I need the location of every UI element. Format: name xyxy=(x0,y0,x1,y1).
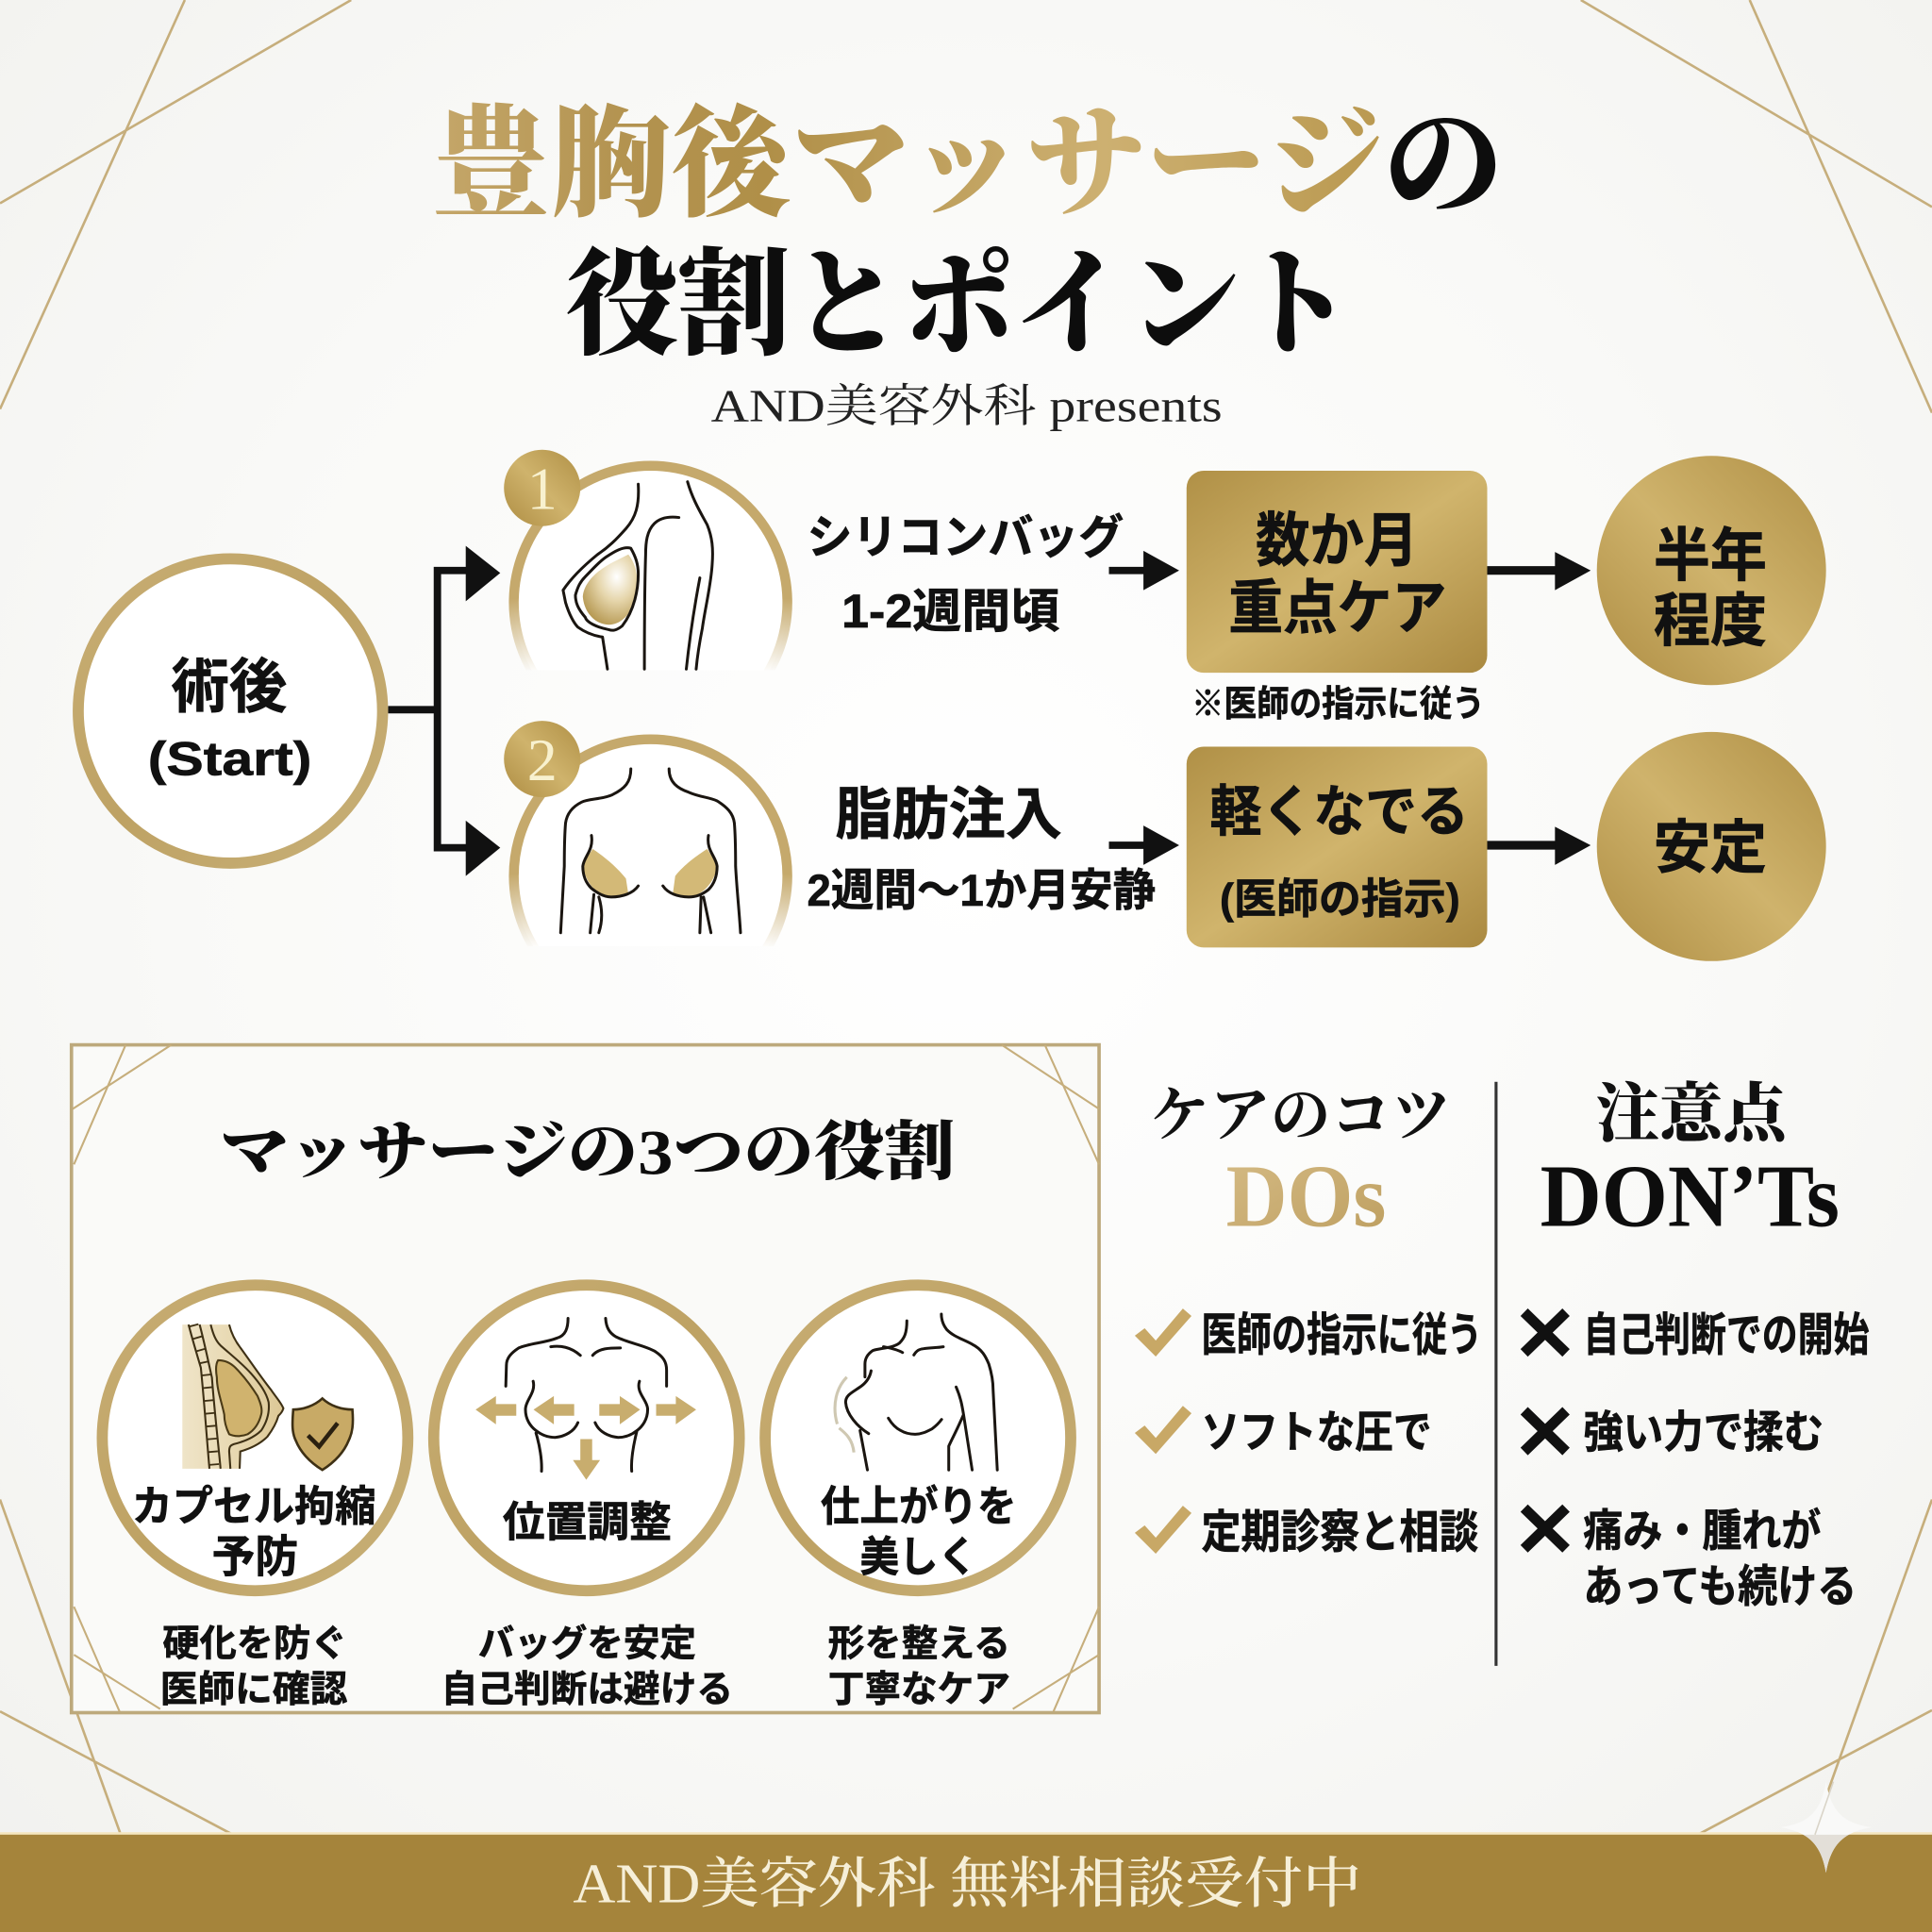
panel: three roles of massage xyxy=(72,1045,1099,1713)
role 3 caption xyxy=(828,1624,1010,1710)
DON'Ts list: 強い力で揉む xyxy=(1583,1407,1824,1457)
illustration 1: silicone bag side view xyxy=(508,460,792,671)
gold circle: half year: 程度 xyxy=(1654,589,1767,654)
step 1 label: シリコンバッグ xyxy=(808,510,1124,563)
panel frame xyxy=(72,1045,1099,1713)
role 1 caption xyxy=(160,1624,347,1710)
step 1 label: 1-2週間頃 xyxy=(841,585,1060,638)
title line 2: 役割とポイント xyxy=(566,242,1352,371)
role 1: capsule contracture prevention: 予防 xyxy=(212,1532,298,1582)
divider xyxy=(1494,1082,1497,1666)
arrow xyxy=(1487,826,1591,865)
gold box: gentle stroke: (医師の指示) xyxy=(1220,876,1460,923)
DOs heading: DOs xyxy=(1226,1148,1386,1246)
gold box: focused care: 数か月 xyxy=(1256,508,1418,574)
badge 2: 2 xyxy=(527,726,558,793)
arrow xyxy=(1109,551,1179,591)
flow: start node: (Start) xyxy=(148,733,311,786)
gold circle: half year xyxy=(1597,456,1826,685)
DON'Ts list xyxy=(1524,1310,1869,1611)
badge 2 xyxy=(504,721,580,797)
note: ※医師の指示に従う xyxy=(1191,685,1485,724)
role 3 caption: 形を整える xyxy=(828,1624,1010,1664)
DOs list: 定期診察と相談 xyxy=(1201,1507,1478,1557)
gold box: focused care xyxy=(1187,471,1487,673)
DON'Ts list: あっても続ける xyxy=(1583,1561,1857,1611)
arrow xyxy=(1109,825,1179,865)
icon: cross xyxy=(1524,1312,1566,1353)
step 2 label xyxy=(808,783,1156,915)
step 1 label xyxy=(808,510,1124,638)
gold circle: stable xyxy=(1597,732,1826,961)
DOs list xyxy=(1135,1308,1482,1557)
title line 1: 豊胸後マッサージの xyxy=(431,98,1503,232)
illustration 2: fat injection front view xyxy=(508,734,792,945)
icon: direction arrows xyxy=(475,1396,696,1480)
role 2 caption: バッグを安定 xyxy=(478,1624,696,1664)
icon: sparkle xyxy=(1798,1781,1870,1874)
gold circle: stable: 安定 xyxy=(1654,816,1767,881)
role 1: capsule contracture prevention: カプセル拘縮 xyxy=(132,1484,375,1530)
DON'Ts list: 痛み・腫れが xyxy=(1583,1506,1821,1556)
footer band xyxy=(0,1832,1932,1932)
step 2 label: 脂肪注入 xyxy=(836,783,1062,846)
DOs heading: ケアのコツ xyxy=(1150,1082,1452,1149)
gold box: focused care: 重点ケア xyxy=(1228,575,1446,641)
DON'Ts heading: DON’Ts xyxy=(1541,1148,1840,1246)
subtitle: AND美容外科 presents xyxy=(711,382,1223,432)
DOs list: 医師の指示に従う xyxy=(1201,1310,1482,1361)
gold circle: half year: 半年 xyxy=(1654,524,1767,589)
arrow xyxy=(1487,552,1591,591)
step 2 label: 2週間〜1か月安静 xyxy=(808,865,1156,915)
role 3: beautiful finish: 美しく xyxy=(860,1534,977,1580)
DOs list: ソフトな圧で xyxy=(1201,1407,1432,1457)
icon: cross xyxy=(1524,1411,1566,1452)
role 1: capsule contracture prevention xyxy=(102,1285,408,1591)
flow: start node xyxy=(78,558,383,863)
role 2: position adjustment xyxy=(434,1285,740,1591)
icon: cross xyxy=(1524,1508,1566,1549)
flow: start node: 術後 xyxy=(172,655,287,721)
role 2 caption xyxy=(441,1624,733,1710)
gold box: gentle stroke xyxy=(1187,747,1487,947)
role 2: position adjustment: 位置調整 xyxy=(503,1500,672,1546)
role 3: beautiful finish: 仕上がりを xyxy=(821,1484,1017,1530)
panel heading: マッサージの3つの役割 xyxy=(219,1117,955,1189)
title xyxy=(431,98,1503,371)
badge 1 xyxy=(504,450,580,526)
DON'Ts heading xyxy=(1541,1078,1840,1246)
DON'Ts heading: 注意点 xyxy=(1595,1078,1792,1150)
footer band: AND美容外科 無料相談受付中 xyxy=(573,1854,1361,1915)
role 3 caption: 丁寧なケア xyxy=(828,1670,1010,1710)
role 3: beautiful finish xyxy=(765,1285,1071,1591)
icon: check xyxy=(1135,1308,1191,1357)
role 1 caption: 硬化を防ぐ xyxy=(162,1624,347,1664)
icon: check xyxy=(1135,1506,1191,1554)
icon: shield with check xyxy=(292,1398,353,1470)
role 2 caption: 自己判断は避ける xyxy=(441,1670,733,1710)
badge 1: 1 xyxy=(527,455,558,522)
icon: check xyxy=(1135,1406,1191,1454)
arrow: branches from start xyxy=(388,546,500,876)
role 1 caption: 医師に確認 xyxy=(160,1670,347,1710)
gold box: gentle stroke: 軽くなでる xyxy=(1210,781,1469,842)
DOs heading xyxy=(1150,1082,1452,1246)
